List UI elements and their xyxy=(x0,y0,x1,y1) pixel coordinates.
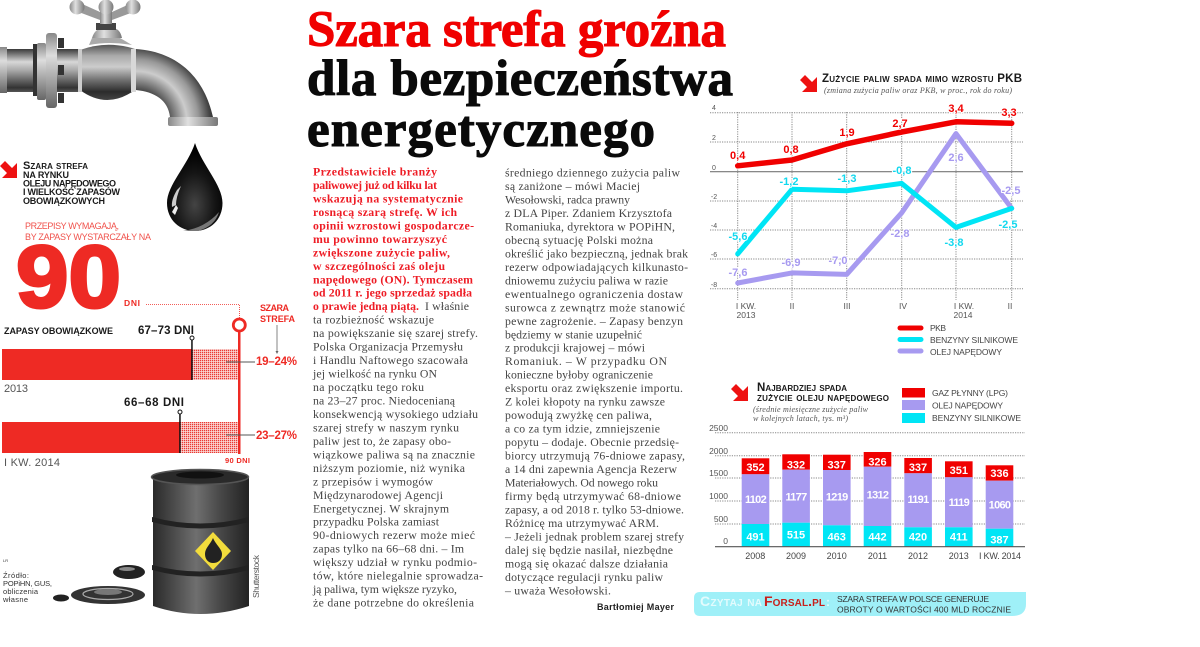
chart heading: zużycie oleju napędowego xyxy=(757,392,889,404)
big number: 90 days: DNI xyxy=(124,298,140,308)
article: right column: Wesołowski, radca prawny xyxy=(505,192,630,206)
heading: grey zone panel: OBOWIĄZKOWYCH xyxy=(23,196,105,206)
x-axis labels: I KW. 2014 xyxy=(979,551,1021,561)
x-axis labels: 2010 xyxy=(827,551,847,561)
labels: petrol: -0,8 xyxy=(893,165,911,177)
bar: 2013 xyxy=(2,336,239,380)
gridlines and axis: 2000 xyxy=(709,446,728,456)
body text: Międzynarodowej Agencji xyxy=(313,488,444,502)
article: left column xyxy=(312,164,483,610)
bar: 2008: 352 xyxy=(746,462,765,474)
icon: oil drop xyxy=(167,143,222,231)
body text: szarej strefy w naszym rynku xyxy=(313,420,459,434)
banner: read on Forsal.pl: OBROTY O WARTOŚCI 400 MLD ROCZNIE xyxy=(837,604,1011,614)
panel: stacked bar chart xyxy=(709,382,1025,561)
article: right column: – uważa Wesołowski. xyxy=(504,583,611,597)
article: right column: biorcy utrzymują 76-dniowe zapasy, xyxy=(505,449,685,463)
article: right column: dniowemu zużyciu paliwa w razie xyxy=(505,273,668,287)
bar: Q1 2014 xyxy=(2,410,239,453)
bar: 2013: 1119 xyxy=(949,497,970,509)
lead paragraph xyxy=(313,164,474,313)
gridlines and axes: 2013 xyxy=(737,310,756,320)
chart subtitle xyxy=(753,405,869,423)
gridlines and axes: 0 xyxy=(712,165,716,172)
icon: red arrow xyxy=(800,75,817,92)
text: source xyxy=(2,558,52,604)
body text: Energetycznej. W skrajnym xyxy=(313,501,449,515)
lead paragraph: w szczególności zaś oleju xyxy=(313,259,445,273)
labels: diesel: -6,9 xyxy=(782,257,800,269)
article: right column: surowca z zewnątrz może stanowić xyxy=(505,300,685,314)
bar: Q1 2014: 336 xyxy=(990,468,1009,480)
bar: 2013: 411 xyxy=(950,532,968,544)
labels: diesel: -7,0 xyxy=(829,255,847,267)
gridlines and axis: 500 xyxy=(714,514,728,524)
text: source: POPiHN, GUS, xyxy=(3,579,52,588)
legend: GAZ PŁYNNY (LPG) xyxy=(932,388,1008,398)
lead paragraph: wskazują na systematycznie xyxy=(313,191,463,205)
body text: z przepisów i wymogów xyxy=(313,474,433,488)
gridlines and axes: I KW. xyxy=(736,301,756,311)
lead paragraph: opinii wzrostowi gospodarcze- xyxy=(313,218,474,232)
bar: Q1 2014 xyxy=(986,465,1013,547)
article: right column: – Jeżeli jednak problem szarej strefy xyxy=(504,529,684,543)
gridlines and axes: -4 xyxy=(711,223,717,230)
article: right column: określić jako bezpieczną, jednak brak xyxy=(505,246,688,260)
chart: reserve bars: 67–73 DNI xyxy=(138,325,194,337)
x-axis labels: 2013 xyxy=(949,551,969,561)
article: right column: są zaniżone – mówi Maciej xyxy=(505,179,640,193)
labels: petrol: -1,3 xyxy=(838,173,856,185)
body text: zapas tylko na 66–68 dni. – Im xyxy=(313,542,464,556)
bar: 2013: 351 xyxy=(950,465,968,477)
article: right column: firmy będą utrzymywać 68-dniowe xyxy=(505,489,681,503)
banner: read on Forsal.pl: Forsal.pl xyxy=(764,593,825,609)
body text: wiązkowe paliwa są na znacznie xyxy=(313,447,475,461)
x-axis labels: 2008 xyxy=(745,551,765,561)
article: right column: obecną sytuację Polski można xyxy=(505,233,654,247)
bar: 2008: 491 xyxy=(746,532,765,544)
gridlines and axes: 2014 xyxy=(954,310,973,320)
bar: 2009 xyxy=(782,454,810,547)
lead paragraph: paliwowej już od kilku lat xyxy=(313,178,437,192)
gridlines and axes: 4 xyxy=(712,105,716,112)
gridlines and axes xyxy=(710,105,1023,320)
panel: fuel use line chart xyxy=(710,73,1023,357)
gridlines and axis: 0 xyxy=(723,536,728,546)
labels: diesel: -7,6 xyxy=(729,267,747,279)
body text: przypadku Polska zamiast xyxy=(313,515,440,529)
bar: 2011: 326 xyxy=(868,457,887,469)
banner: read on Forsal.pl: SZARA STREFA W POLSCE GENERUJE xyxy=(837,594,989,604)
gridlines and axes: I KW. xyxy=(954,301,974,311)
article: right column: będziemy w stanie uzupełnić xyxy=(505,327,642,341)
illustration: oil barrel with spills xyxy=(53,470,249,614)
gridlines and axes: III xyxy=(843,301,851,311)
lead paragraph: o prawie jedną piątą. xyxy=(313,299,419,313)
chart: reserve bars: 19–24% xyxy=(256,356,297,368)
lead paragraph: napędowego (ON). Tymczasem xyxy=(313,272,473,286)
banner: read on Forsal.pl: : xyxy=(826,595,830,609)
chart: reserve bars: 2013 xyxy=(4,383,28,395)
labels: petrol: -5,6 xyxy=(729,231,747,243)
banner: read on Forsal.pl: Czytaj na xyxy=(700,593,762,609)
article: right column: dalej się będzie nasilał, niezbędne xyxy=(505,543,673,557)
labels: GDP: 0,4 xyxy=(730,150,746,162)
bar: 2010: 1219 xyxy=(826,492,848,504)
chart: reserve bars: STREFA xyxy=(260,314,296,324)
article: right column: mogą się okazać dalsze działania xyxy=(505,556,669,570)
bar: 2010 xyxy=(823,455,851,547)
article: right column: Romaniuk. – W przypadku ON xyxy=(505,354,667,368)
article: right column: Różnicę ma utrzymywać ARM. xyxy=(505,516,659,530)
x-axis labels: 2011 xyxy=(868,551,887,561)
icon: hazard diamond xyxy=(195,532,231,570)
chart: reserve bars: ZAPASY OBOWIĄZKOWE xyxy=(4,326,113,336)
labels: petrol: -1,2 xyxy=(780,176,798,188)
x-axis labels xyxy=(745,551,1021,561)
bar: 2011 xyxy=(864,452,891,547)
article: right column: powodują zwyżkę cen paliwa, xyxy=(505,408,652,422)
lead paragraph: mu powinno towarzyszyć xyxy=(313,232,447,246)
icon: red arrow xyxy=(731,384,748,401)
article: right column: pewne zagrożenie. – Zapasy benzyn xyxy=(505,314,683,328)
labels: GDP: 3,3 xyxy=(1001,107,1017,119)
chart heading: Zużycie paliw spada mimo wzrostu PKB xyxy=(822,73,1022,85)
article: right column: eksportu oraz zwiększenie importu. xyxy=(505,381,683,395)
big number: 90 days: 90 xyxy=(16,227,121,326)
lead paragraph: od 2011 r. jego sprzedaż spadła xyxy=(313,286,472,300)
text: source: LR xyxy=(3,558,8,563)
banner: read on Forsal.pl xyxy=(694,592,1026,616)
credit: shutterstock: Shutterstock xyxy=(251,554,261,598)
labels: GDP: 3,4 xyxy=(948,103,965,115)
title: energetycznego xyxy=(307,102,655,158)
labels: petrol xyxy=(729,165,1017,249)
article: right column: Materiałowych. Od nowego roku xyxy=(505,476,658,490)
bar: 2010: 463 xyxy=(828,532,846,544)
lead paragraph: zwiększone zużycie paliw, xyxy=(313,245,450,259)
body text: jej wielkość na rynku ON xyxy=(312,367,437,381)
gridlines and axis: 2500 xyxy=(709,423,728,433)
bar: 2008: 1102 xyxy=(745,494,767,506)
body text: niższym poziomie, niż wynika xyxy=(313,461,466,475)
article: right column: z DLA Piper. Zdaniem Krzysztofa xyxy=(505,206,673,220)
bar: 2010: 337 xyxy=(828,460,846,472)
bar: 2012: 337 xyxy=(909,462,927,474)
x-axis labels: 2009 xyxy=(786,551,806,561)
body text: że dane potrzebne do określenia xyxy=(313,596,475,610)
legend: BENZYNY SILNIKOWE xyxy=(930,335,1018,345)
labels: diesel xyxy=(729,152,1020,279)
chart: reserve bars xyxy=(2,303,297,469)
heading: grey zone panel: OLEJU NAPĘDOWEGO xyxy=(23,178,116,188)
line: petrol xyxy=(738,183,1012,254)
labels: GDP: 1,9 xyxy=(839,127,855,139)
heading: grey zone panel: I WIELKOŚĆ ZAPASÓW xyxy=(23,186,120,197)
chart subtitle: (średnie miesięczne zużycie paliw xyxy=(753,405,869,414)
bar: 2012: 1191 xyxy=(907,494,929,506)
labels: petrol: -2,5 xyxy=(999,219,1017,231)
byline: Bartłomiej Mayer xyxy=(597,602,674,612)
x-axis labels: 2012 xyxy=(908,551,928,561)
body text: ją paliwa, tym większe ryzyko, xyxy=(312,582,457,596)
chart subtitle: (zmiana zużycia paliw oraz PKB, w proc., rok do roku) xyxy=(824,86,1012,95)
text: source: obliczenia xyxy=(3,587,39,596)
body text: ta rozbieżność wskazuje xyxy=(313,313,434,327)
article: right column xyxy=(504,166,688,597)
bar: 2013 xyxy=(945,461,973,547)
text: regulation requirement xyxy=(25,221,151,242)
bar: Q1 2014: 387 xyxy=(990,534,1009,546)
article: right column: konieczne byłoby ograniczenie xyxy=(505,368,653,382)
legend xyxy=(900,323,1018,357)
title: dla bezpieczeństwa xyxy=(307,51,733,107)
gridlines and axis xyxy=(709,423,1025,546)
title xyxy=(307,2,733,158)
body text: I właśnie xyxy=(425,299,469,313)
bar: 2009: 1177 xyxy=(785,492,807,504)
title: Szara strefa groźna xyxy=(307,2,726,58)
gridlines and axes: IV xyxy=(899,301,907,311)
article: right column: Romaniuka, dyrektora w POPiHN, xyxy=(505,219,675,233)
bar: 2008 xyxy=(742,458,769,547)
bar: 2011: 1312 xyxy=(867,490,889,502)
chart: reserve bars: 23–27% xyxy=(256,430,297,442)
article: right column: ewentualnego ograniczenia dostaw xyxy=(505,287,683,301)
labels: petrol: -3,8 xyxy=(945,237,963,249)
article: right column: z produkcji krajowej – mówi xyxy=(505,341,646,355)
legend: OLEJ NAPĘDOWY xyxy=(930,347,1002,357)
gridlines and axes: -2 xyxy=(711,194,717,201)
article: right column: zapasy, a od 2018 r. tylko 53-dniowe. xyxy=(505,502,684,516)
bar: 2009: 515 xyxy=(787,529,805,541)
article: right column: popytu – dodaje. Obecnie przedsię- xyxy=(505,435,679,449)
article: right column: rezerw odpowiadających kilkunasto- xyxy=(505,260,688,274)
text: regulation requirement: BY ZAPASY WYSTARCZAŁY NA xyxy=(25,232,151,242)
heading: grey zone panel xyxy=(23,160,120,206)
bar: Q1 2014: 1060 xyxy=(989,500,1011,512)
gridlines and axis: 1500 xyxy=(709,468,728,478)
body text xyxy=(312,299,483,610)
legend: BENZYNY SILNIKOWE xyxy=(932,413,1021,423)
labels: diesel: 2,6 xyxy=(948,152,964,164)
heading: grey zone panel: Szara strefa xyxy=(23,160,88,172)
text: source: Źródło: xyxy=(3,571,29,580)
lead paragraph: Przedstawiciele branży xyxy=(313,164,437,178)
body text: i Handlu Naftowego szacowała xyxy=(313,353,469,367)
bar: 2009: 332 xyxy=(787,460,805,472)
line: GDP xyxy=(738,122,1012,166)
article: right column: średniego dziennego zużycia paliw xyxy=(505,166,680,180)
chart: reserve bars: I KW. 2014 xyxy=(4,457,60,469)
gridlines and axis: 1000 xyxy=(709,491,728,501)
heading: grey zone panel: NA RYNKU xyxy=(23,170,69,180)
bar: 2012: 420 xyxy=(909,532,927,544)
gridlines and axes: -6 xyxy=(711,252,717,259)
labels: GDP xyxy=(730,103,1017,162)
chart heading: Najbardziej spada xyxy=(757,382,847,394)
labels: GDP: 2,7 xyxy=(892,118,908,130)
labels: diesel: -2,8 xyxy=(891,228,909,240)
line: diesel oil xyxy=(738,134,1012,283)
chart: reserve bars: 66–68 DNI xyxy=(124,397,184,409)
body text: na powiększanie się szarej strefy. xyxy=(313,326,478,340)
article: right column: dotyczące regulacji rynku paliw xyxy=(505,570,663,584)
chart: reserve bars: 90 DNI xyxy=(225,456,250,465)
legend: OLEJ NAPĘDOWY xyxy=(932,400,1003,410)
gridlines and axes: II xyxy=(790,301,794,311)
icon: red arrow panel left xyxy=(0,161,17,178)
body text: 90-dniowych rezerw może mieć xyxy=(313,528,475,542)
labels: GDP: 0,8 xyxy=(783,144,799,156)
body text: na początku tego roku xyxy=(313,380,424,394)
gridlines and axes: -8 xyxy=(711,282,717,289)
body text: paliw jest to, że zapasy obo- xyxy=(313,434,451,448)
article: right column: a 14 dni zapewnia Agencja Rezerw xyxy=(505,462,677,476)
bar: 2012 xyxy=(904,458,932,547)
article: right column: Z kolei kłopoty na rynku zawsze xyxy=(505,395,665,409)
chart subtitle: w kolejnych latach, tys. m³) xyxy=(753,414,848,423)
legend xyxy=(902,388,1021,423)
lead paragraph: rosnącą szarą strefę. W ich xyxy=(313,205,457,219)
bar: 2011: 442 xyxy=(868,532,887,544)
legend: PKB xyxy=(930,323,946,333)
body text: konsekwencją wysokiego udziału xyxy=(313,407,478,421)
text: source: własne xyxy=(2,595,28,604)
gridlines and axes: II xyxy=(1008,301,1012,311)
chart: reserve bars: SZARA xyxy=(260,303,290,313)
body text: na 23–27 proc. Niedocenianą xyxy=(313,394,456,408)
chart heading xyxy=(757,382,889,404)
body text: większy udział w rynku podmio- xyxy=(313,555,477,569)
gridlines and axes: 2 xyxy=(712,135,716,142)
body text: Polska Organizacja Przemysłu xyxy=(313,340,463,354)
icon: faucet xyxy=(0,0,218,126)
labels: diesel: -2,5 xyxy=(1002,185,1020,197)
text: regulation requirement: PRZEPISY WYMAGAJĄ, xyxy=(25,221,119,231)
body text: tów, które nielegalnie sprowadza- xyxy=(313,569,483,583)
article: right column: a co za tym idzie, zmniejszenie xyxy=(505,422,660,436)
